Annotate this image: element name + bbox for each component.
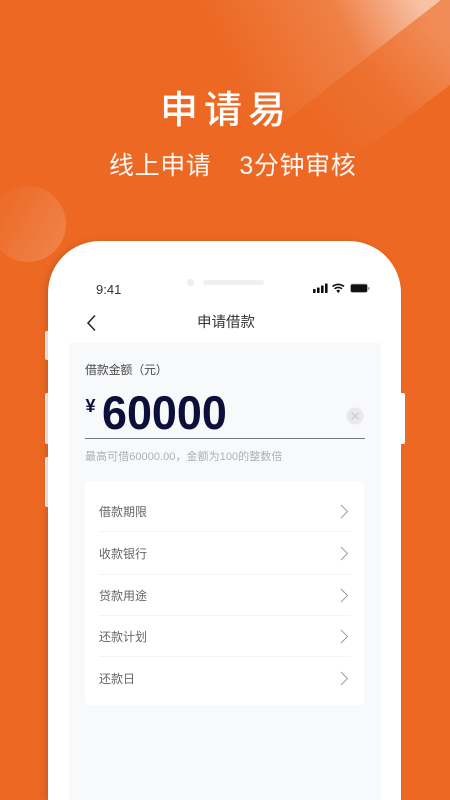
back arrow <box>87 315 96 331</box>
speaker <box>203 280 264 285</box>
screen content background <box>69 343 381 800</box>
phone mockup <box>48 241 401 800</box>
options card <box>85 481 364 705</box>
row: loan term: 借款期限 <box>99 505 147 519</box>
clear button <box>346 408 364 424</box>
row: repayment plan: 还款计划 <box>99 630 147 644</box>
row: repayment date: 还款日 <box>99 672 135 686</box>
amount underline <box>85 438 365 439</box>
amount hint: 最高可借60000.00，金额为100的整数倍 <box>85 450 282 462</box>
status icons <box>313 284 370 293</box>
row: receiving bank: 收款银行 <box>99 547 147 561</box>
title: 申请易 <box>160 90 292 132</box>
row: loan purpose: 贷款用途 <box>99 589 147 603</box>
background light streaks <box>0 0 450 262</box>
amount value: 60000 <box>102 386 226 439</box>
currency symbol: ¥ <box>86 396 96 416</box>
front camera <box>187 279 194 286</box>
status time: 9:41 <box>96 282 121 297</box>
screen title: 申请借款 <box>197 315 255 331</box>
row chevrons <box>340 504 348 686</box>
subtitle: 线上申请 3分钟审核 <box>109 152 356 180</box>
amount label: 借款金额（元） <box>85 362 168 376</box>
phone side buttons <box>45 331 405 507</box>
